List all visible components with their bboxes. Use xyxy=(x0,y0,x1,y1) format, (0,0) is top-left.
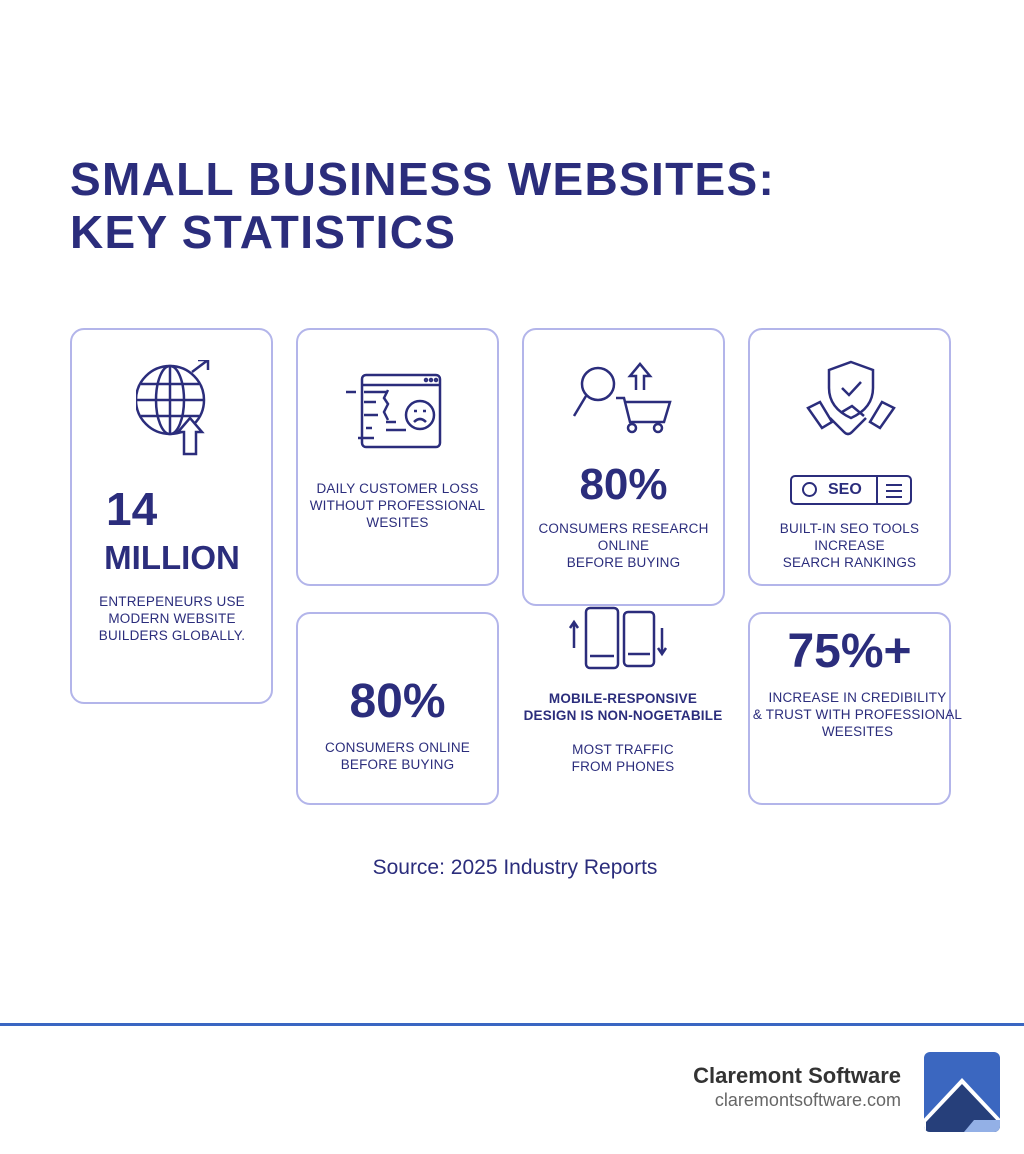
SEO search bar: SEO xyxy=(828,481,862,498)
panel: 14 million: BUILDERS GLOBALLY. xyxy=(99,628,245,643)
panel: 75%+: 75%+ xyxy=(787,625,912,678)
icon: globe xyxy=(136,360,210,456)
icon: phones xyxy=(569,606,667,670)
title: SMALL BUSINESS WEBSITES: xyxy=(70,153,775,205)
panel: SEO: INCREASE xyxy=(814,538,885,553)
panel: 80% research: BEFORE BUYING xyxy=(567,555,680,570)
panel: 14 million: MILLION xyxy=(104,539,240,576)
title: KEY STATISTICS xyxy=(70,206,456,258)
panel: 75%+ xyxy=(748,612,951,805)
panel: 14 million: ENTREPENEURS USE xyxy=(99,594,245,609)
panel: 80% research: 80% xyxy=(579,460,668,509)
panel: 75%+: & TRUST WITH PROFESSIONAL xyxy=(753,707,962,722)
source: Source: 2025 Industry Reports xyxy=(373,856,657,879)
panel: SEO: BUILT-IN SEO TOOLS xyxy=(780,521,919,536)
SEO search bar xyxy=(790,475,912,505)
panel: customer loss: DAILY CUSTOMER LOSS xyxy=(316,481,479,496)
panel: customer loss xyxy=(296,328,499,586)
panel: SEO: SEARCH RANKINGS xyxy=(783,555,916,570)
panel: customer loss: WESITES xyxy=(366,515,429,530)
panel: customer loss: WITHOUT PROFESSIONAL xyxy=(310,498,485,513)
panel: mobile: FROM PHONES xyxy=(572,759,674,774)
panel: 80% research xyxy=(522,328,725,606)
footer brand text: Claremont Software xyxy=(693,1063,901,1088)
footer brand text: claremontsoftware.com xyxy=(715,1090,901,1110)
panel: mobile: DESIGN IS NON-NOGETABILE xyxy=(524,708,722,723)
icon: shield handshake xyxy=(806,360,896,436)
panel: mobile: MOST TRAFFIC xyxy=(572,742,674,757)
panel: 80% research: CONSUMERS RESEARCH xyxy=(538,521,709,536)
icon: sad browser xyxy=(346,374,442,448)
panel: mobile xyxy=(524,606,722,774)
title xyxy=(70,153,775,258)
logo xyxy=(924,1052,1000,1132)
panel: 75%+: WEESITES xyxy=(822,724,893,739)
footer brand text xyxy=(693,1063,901,1110)
icon: search cart xyxy=(573,362,672,434)
panel: 80% research: ONLINE xyxy=(598,538,649,553)
panel: SEO xyxy=(748,328,951,586)
panel: 14 million xyxy=(70,328,273,704)
panel: 75%+: INCREASE IN CREDIBILITY xyxy=(769,690,946,705)
panel: 14 million: MODERN WEBSITE xyxy=(108,611,236,626)
panel: 80% online: CONSUMERS ONLINE xyxy=(325,740,470,755)
panel: 80% online xyxy=(296,612,499,805)
panel: mobile: MOBILE-RESPONSIVE xyxy=(549,691,697,706)
panel: 80% online: BEFORE BUYING xyxy=(341,757,454,772)
stat: 14 xyxy=(106,483,157,535)
panel: 80% online: 80% xyxy=(349,675,446,728)
